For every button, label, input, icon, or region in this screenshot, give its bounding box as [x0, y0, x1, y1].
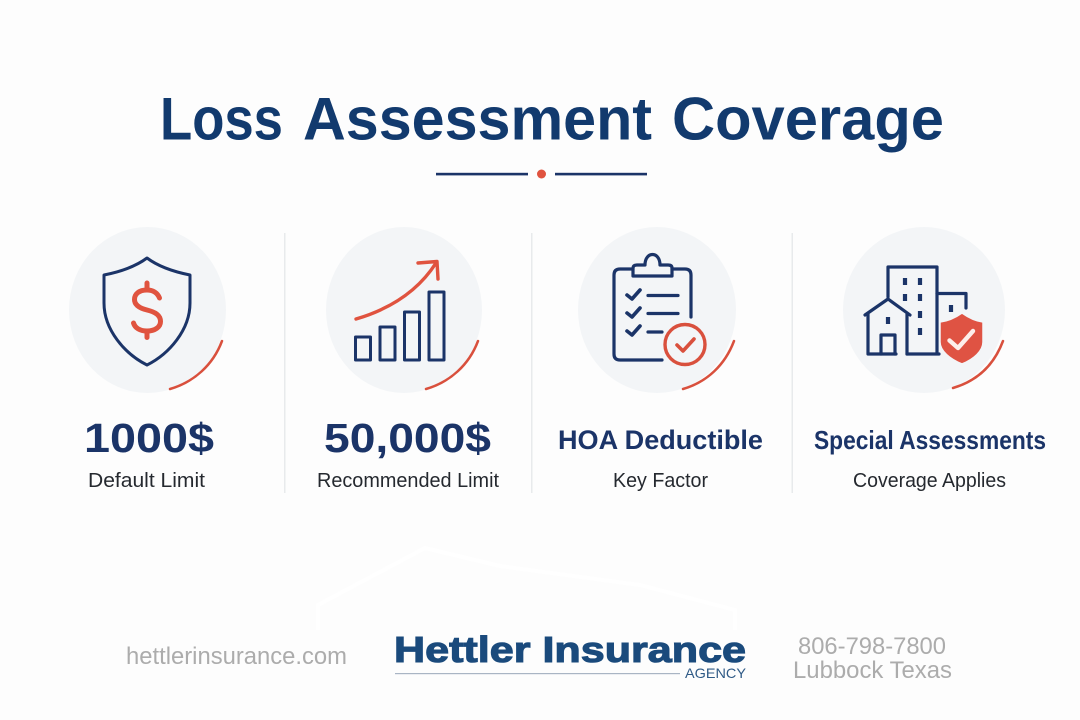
logo: Hettler Insurance Agency: AGENCY	[685, 665, 747, 681]
icon: clipboard checklist	[578, 227, 736, 393]
label: default limit: Default Limit	[88, 470, 205, 492]
phone: 806-798-7800	[798, 633, 946, 660]
icon: rising bar chart	[326, 227, 482, 393]
logo: Hettler Insurance Agency	[394, 629, 747, 681]
logo: Hettler Insurance Agency: Hettler Insurance	[394, 629, 746, 670]
title	[160, 86, 944, 152]
icon: buildings with shield	[843, 227, 1005, 393]
panel: HOA deductible	[558, 227, 763, 492]
title divider	[436, 170, 647, 178]
panel: default limit	[69, 227, 226, 492]
label: key factor: Key Factor	[613, 470, 708, 492]
title: Loss	[160, 86, 283, 152]
label: coverage applies: Coverage Applies	[853, 470, 1006, 492]
heading: HOA deductible: HOA Deductible	[558, 425, 763, 455]
stat: 50,000$: 50,000$	[324, 415, 491, 461]
title: Coverage	[672, 86, 944, 152]
heading: special assessments: Special Assessments	[814, 425, 1046, 455]
icon: shield with dollar sign	[69, 227, 226, 393]
location: Lubbock Texas	[793, 657, 952, 684]
label: recommended limit: Recommended Limit	[317, 470, 499, 492]
title: Assessment	[303, 86, 652, 152]
footer	[126, 548, 952, 684]
panel: recommended limit	[317, 227, 499, 492]
website: hettlerinsurance.com	[126, 643, 347, 670]
stat: 1000$: 1000$	[84, 415, 214, 461]
watermark: faint roofline	[318, 548, 735, 630]
panel: special assessments	[814, 227, 1046, 492]
